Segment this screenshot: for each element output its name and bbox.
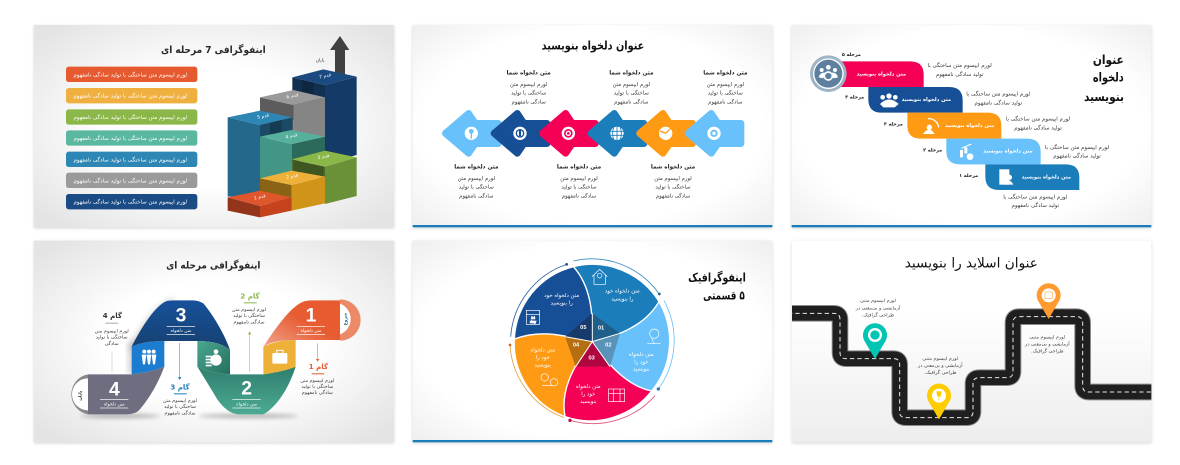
ribbon numbers and labels: متن دلخواه xyxy=(301,329,322,334)
outer arc arrows xyxy=(509,259,674,424)
stage descriptions: لورم ایپسوم متن ساختگی با xyxy=(1003,193,1068,200)
step list xyxy=(66,67,197,209)
pin: teal xyxy=(863,323,887,359)
title: دلخواه xyxy=(1093,70,1124,85)
pie labels: متن دلخواه xyxy=(530,347,555,353)
pie labels xyxy=(530,288,654,405)
stage descriptions: تولید سادگی نامفهوم xyxy=(936,71,984,78)
panel: seven step staircase slide xyxy=(34,25,394,228)
pie labels: خود را xyxy=(581,392,595,398)
pie labels: را بنویسید xyxy=(611,296,634,302)
band icons xyxy=(880,93,1013,185)
pie labels: متن دلخواه xyxy=(629,352,654,358)
pie labels: متن دلخواه خود xyxy=(605,288,640,294)
ribbon numbers and labels: متن دلخواه xyxy=(236,402,258,407)
road captions: طراحی گرافیک. xyxy=(1031,348,1064,355)
top captions: سادگی نامفهوم xyxy=(708,98,743,105)
pie centre pentagon xyxy=(565,313,620,367)
pie labels: بنویسید xyxy=(633,367,650,373)
pie icons: day xyxy=(530,320,537,324)
bottom captions: متن دلخواه شما xyxy=(557,165,602,171)
ribbon shadows xyxy=(80,298,298,418)
stage bands: متن دلخواه بنویسید xyxy=(902,97,951,103)
ribbon numbers and labels: 1 xyxy=(306,306,317,327)
bottom captions: لورم ایپسوم متن xyxy=(560,176,598,182)
step list: لورم ایپسوم متن ساختگی با تولید سادگی نامفهوم xyxy=(74,135,187,142)
ribbon: end cap: پایان xyxy=(79,390,84,401)
pie centre pentagon: 01 xyxy=(598,325,604,331)
road captions: طراحی گرافیک. xyxy=(862,311,894,318)
staircase chart xyxy=(228,69,357,217)
step 4 note: گام 4 xyxy=(103,311,123,320)
bottom captions: ساختگی با تولید xyxy=(655,184,691,191)
bottom captions: لورم ایپسوم متن xyxy=(654,176,692,182)
step 3 note: لورم ایپسوم متن xyxy=(163,398,198,404)
pie labels: متن دلخواه خود xyxy=(544,293,579,299)
stage descriptions: تولید سادگی نامفهوم xyxy=(1012,202,1060,209)
stage bands xyxy=(828,61,1079,190)
stage labels: مرحله ۲ xyxy=(923,147,942,153)
ribbon numbers and labels: 2 xyxy=(241,379,252,400)
pie centre pentagon: 02 xyxy=(605,343,611,349)
ribbon: step 2 xyxy=(197,367,296,414)
pin: orange xyxy=(1037,283,1061,319)
ribbon: step 3 xyxy=(132,300,230,350)
step list: لورم ایپسوم متن ساختگی با تولید سادگی نامفهوم xyxy=(74,177,187,184)
ribbon: step 1 xyxy=(263,300,340,347)
stage descriptions: تولید سادگی نامفهوم xyxy=(1053,153,1101,160)
panel: five part pie slide xyxy=(413,241,772,443)
stage labels: مرحله ۳ xyxy=(884,121,903,127)
top captions: لورم ایپسوم متن xyxy=(510,82,548,88)
stage descriptions: لورم ایپسوم متن ساختگی با xyxy=(1006,116,1070,123)
title: اینفوگرافیک xyxy=(688,270,746,285)
step 4 note xyxy=(95,311,129,372)
top captions: متن دلخواه شما xyxy=(507,71,551,77)
ribbon: start cap xyxy=(340,299,361,341)
stage bands: متن دلخواه بنویسید xyxy=(1022,175,1071,181)
bottom captions: لورم ایپسوم متن xyxy=(458,176,495,182)
ribbon: yellow icon panel xyxy=(263,340,296,374)
top captions: سادگی نامفهوم xyxy=(512,98,546,105)
step 4 note: ساختگی با تولید xyxy=(96,334,128,341)
step 2 note xyxy=(232,292,267,372)
pie centre pentagon: 04 xyxy=(573,343,580,349)
top captions: متن دلخواه شما xyxy=(703,71,748,77)
bottom captions: متن دلخواه شما xyxy=(454,165,499,171)
title: عنوان xyxy=(1093,52,1124,67)
ribbon numbers and labels xyxy=(100,306,325,408)
step list: لورم ایپسوم متن ساختگی با تولید سادگی نامفهوم xyxy=(74,93,187,100)
staircase chart: قدم 6 xyxy=(286,92,299,101)
step 2 note: سادگی نامفهوم xyxy=(233,318,265,325)
pie centre pentagon: 05 xyxy=(580,325,586,331)
stage labels: مرحله ۵ xyxy=(842,52,861,58)
step 1 note: ساختگی با تولید xyxy=(301,383,333,390)
icon: team gear badge xyxy=(810,55,847,92)
step 1 note: لورم ایپسوم متن xyxy=(300,378,335,384)
bottom captions: سادگی نامفهوم xyxy=(459,192,494,199)
title: اینفوگرافی مرحله ای xyxy=(166,258,260,271)
panel: six arrows slide xyxy=(413,25,772,228)
end label: پایان xyxy=(316,58,325,64)
title: بنویسید xyxy=(1084,89,1124,104)
road captions: آزمایشی و بی‌معنی در xyxy=(1024,341,1070,348)
pie labels: متن دلخواه xyxy=(576,384,601,390)
step 2 note: لورم ایپسوم متن xyxy=(232,307,267,313)
ribbon numbers and labels: 4 xyxy=(109,379,120,400)
stage descriptions xyxy=(928,62,1109,209)
stage bands: متن دلخواه بنویسید xyxy=(857,72,906,78)
step 1 note: سادگی نامفهوم xyxy=(302,389,333,396)
top captions xyxy=(507,71,748,105)
stage labels xyxy=(842,52,978,179)
stage labels: مرحله ۴ xyxy=(845,95,864,101)
ribbon numbers and labels: 3 xyxy=(176,306,187,327)
road xyxy=(788,313,1155,418)
arrow icons xyxy=(465,127,721,140)
stage descriptions: تولید سادگی نامفهوم xyxy=(1014,124,1062,131)
pie labels: بنویسید xyxy=(534,362,551,368)
top captions: لورم ایپسوم متن xyxy=(613,82,650,88)
step 3 note: سادگی نامفهوم xyxy=(164,409,196,416)
staircase chart: قدم 4 xyxy=(285,132,298,141)
pie labels: بنویسید xyxy=(580,399,597,405)
staircase chart: قدم 5 xyxy=(257,113,270,121)
panel: road map slide xyxy=(788,241,1155,443)
step list: لورم ایپسوم متن ساختگی با تولید سادگی نامفهوم xyxy=(74,114,187,121)
bottom captions: سادگی نامفهوم xyxy=(656,192,691,199)
stage bands: متن دلخواه بنویسید xyxy=(945,123,994,129)
bottom captions: ساختگی با تولید xyxy=(459,184,494,191)
staircase chart: قدم 2 xyxy=(286,173,299,181)
road captions: لورم ایپسوم متنی xyxy=(922,356,959,362)
road captions: آزمایشی و بی‌معنی در xyxy=(855,304,901,311)
title xyxy=(688,270,746,303)
step 2 note: گام 2 xyxy=(240,292,260,301)
road captions: طراحی گرافیک. xyxy=(924,369,957,376)
step 4 note: لورم ایپسوم متن xyxy=(95,328,129,334)
stage labels: مرحله ۱ xyxy=(959,173,978,179)
bottom captions: ساختگی با تولید xyxy=(561,184,597,191)
step list: لورم ایپسوم متن ساختگی با تولید سادگی نامفهوم xyxy=(74,71,187,78)
title: ۵ قسمتی xyxy=(703,289,745,303)
title xyxy=(1084,52,1124,104)
ribbon: blue icon panel xyxy=(132,341,164,374)
arrow: finish xyxy=(330,36,349,74)
top captions: ساختگی با تولید xyxy=(511,90,547,97)
top captions: لورم ایپسوم متن xyxy=(707,82,744,88)
ribbon: green icon panel xyxy=(197,341,230,374)
arrow chain xyxy=(445,113,741,153)
pie chart xyxy=(514,264,670,421)
ribbon numbers and labels: متن دلخواه xyxy=(171,329,192,334)
pie icons: 14 xyxy=(531,316,536,320)
panel: five stage diagonal slide xyxy=(792,25,1151,228)
road captions: لورم ایپسوم متنی xyxy=(1029,334,1066,340)
staircase chart: قدم 7 xyxy=(319,72,332,81)
step 2 note: ساختگی با تولید xyxy=(233,312,265,319)
step 3 note: گام 3 xyxy=(170,383,190,392)
ribbon: end cap xyxy=(71,374,88,414)
top captions: متن دلخواه شما xyxy=(609,71,654,77)
pie labels: خود را xyxy=(536,355,550,361)
ribbon icons xyxy=(142,349,287,366)
ribbon: step 4 xyxy=(88,367,164,414)
step 3 note xyxy=(163,343,198,416)
pie icons xyxy=(526,269,661,402)
pie labels: خود را xyxy=(634,359,648,365)
step 3 note: ساختگی با تولید xyxy=(164,403,196,410)
panel: ribbon steps slide xyxy=(34,241,394,443)
pie labels: را بنویسید xyxy=(551,300,573,306)
road captions xyxy=(855,298,1070,376)
title: عنوان اسلاید را بنویسید xyxy=(905,256,1038,272)
road captions: لورم ایپسوم متنی xyxy=(860,298,896,304)
staircase chart: قدم 3 xyxy=(317,153,330,161)
pin: yellow xyxy=(927,384,951,419)
title: اینفوگرافی 7 مرحله ای xyxy=(161,43,266,56)
step 4 note: سادگی xyxy=(105,340,119,347)
top captions: ساختگی با تولید xyxy=(614,90,649,97)
top captions: ساختگی با تولید xyxy=(708,90,743,97)
step 1 note xyxy=(300,343,335,396)
ribbon numbers and labels: متن دلخواه xyxy=(104,402,125,407)
stage bands: متن دلخواه بنویسید xyxy=(983,149,1033,155)
title: عنوان دلخواه بنویسید xyxy=(542,39,644,54)
road captions: آزمایشی و بی‌معنی در xyxy=(917,362,963,369)
stage descriptions: لورم ایپسوم متن ساختگی با xyxy=(966,91,1031,98)
stage descriptions: لورم ایپسوم متن ساختگی با xyxy=(1045,144,1109,151)
pie centre pentagon: 03 xyxy=(589,356,595,362)
bottom captions: سادگی نامفهوم xyxy=(562,192,597,199)
step list: لورم ایپسوم متن ساختگی با تولید سادگی نامفهوم xyxy=(74,156,187,163)
staircase chart: قدم 1 xyxy=(253,193,266,202)
ribbon: start cap: شروع xyxy=(344,313,349,325)
bottom captions xyxy=(454,165,696,199)
step list: لورم ایپسوم متن ساختگی با تولید سادگی نامفهوم xyxy=(74,199,187,206)
top captions: سادگی نامفهوم xyxy=(614,98,649,105)
step 1 note: گام 1 xyxy=(309,362,329,371)
stage descriptions: تولید سادگی نامفهوم xyxy=(975,100,1023,107)
stage descriptions: لورم ایپسوم متن ساختگی با xyxy=(928,62,992,69)
bottom captions: متن دلخواه شما xyxy=(651,165,696,171)
